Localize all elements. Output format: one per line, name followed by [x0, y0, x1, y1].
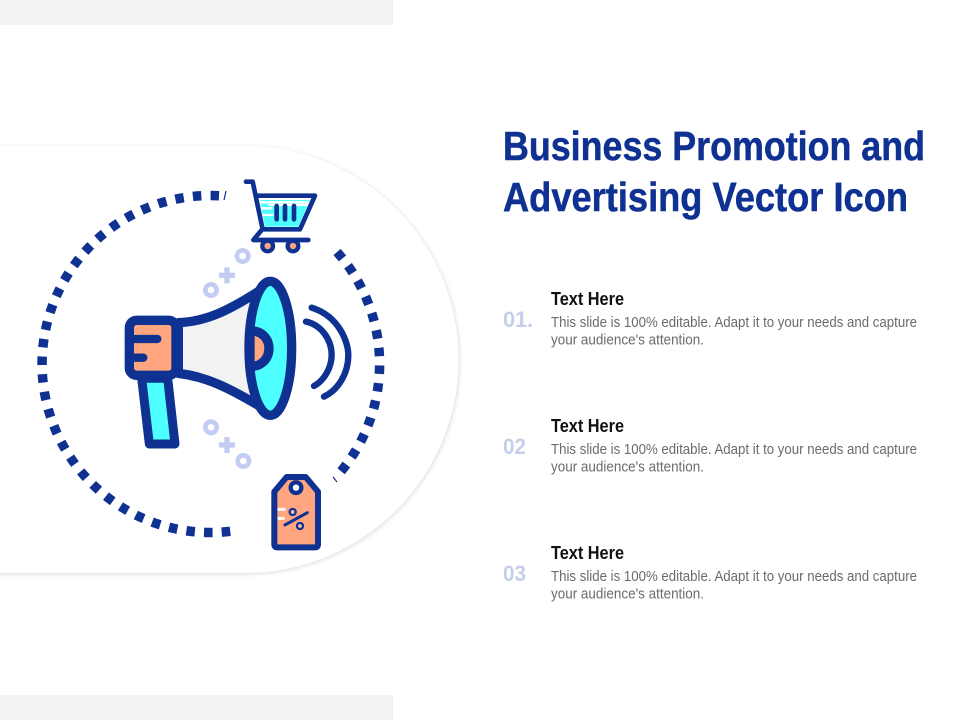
top grey band	[0, 0, 393, 25]
item 03: This slide is 100% editable. Adapt it to your needs and capture	[551, 569, 917, 585]
icon: megaphone	[129, 281, 348, 444]
item 02: 02	[503, 434, 526, 459]
title	[503, 123, 925, 220]
item 02	[503, 416, 917, 476]
item 03	[503, 543, 917, 602]
item 01: your audience's attention.	[551, 332, 704, 348]
item 02: your audience's attention.	[551, 460, 704, 476]
item 02: This slide is 100% editable. Adapt it to your needs and capture	[551, 442, 917, 458]
title: Advertising Vector Icon	[503, 174, 908, 220]
item 01: This slide is 100% editable. Adapt it to your needs and capture	[551, 315, 917, 331]
item 01: Text Here	[551, 289, 624, 309]
item 01: 01.	[503, 307, 533, 332]
small tick marks	[224, 191, 337, 482]
item 03: Text Here	[551, 543, 624, 563]
icon: shopping cart	[246, 182, 315, 251]
panel: white rounded circle	[0, 146, 458, 573]
icon: price tag	[274, 477, 318, 547]
item 02: Text Here	[551, 416, 624, 436]
item 03: your audience's attention.	[551, 586, 704, 602]
dotted ring	[42, 195, 380, 532]
bottom grey band	[0, 695, 393, 720]
item 01	[503, 289, 917, 348]
item 03: 03	[503, 561, 526, 586]
icon: decorative rings and plus marks	[205, 250, 249, 467]
